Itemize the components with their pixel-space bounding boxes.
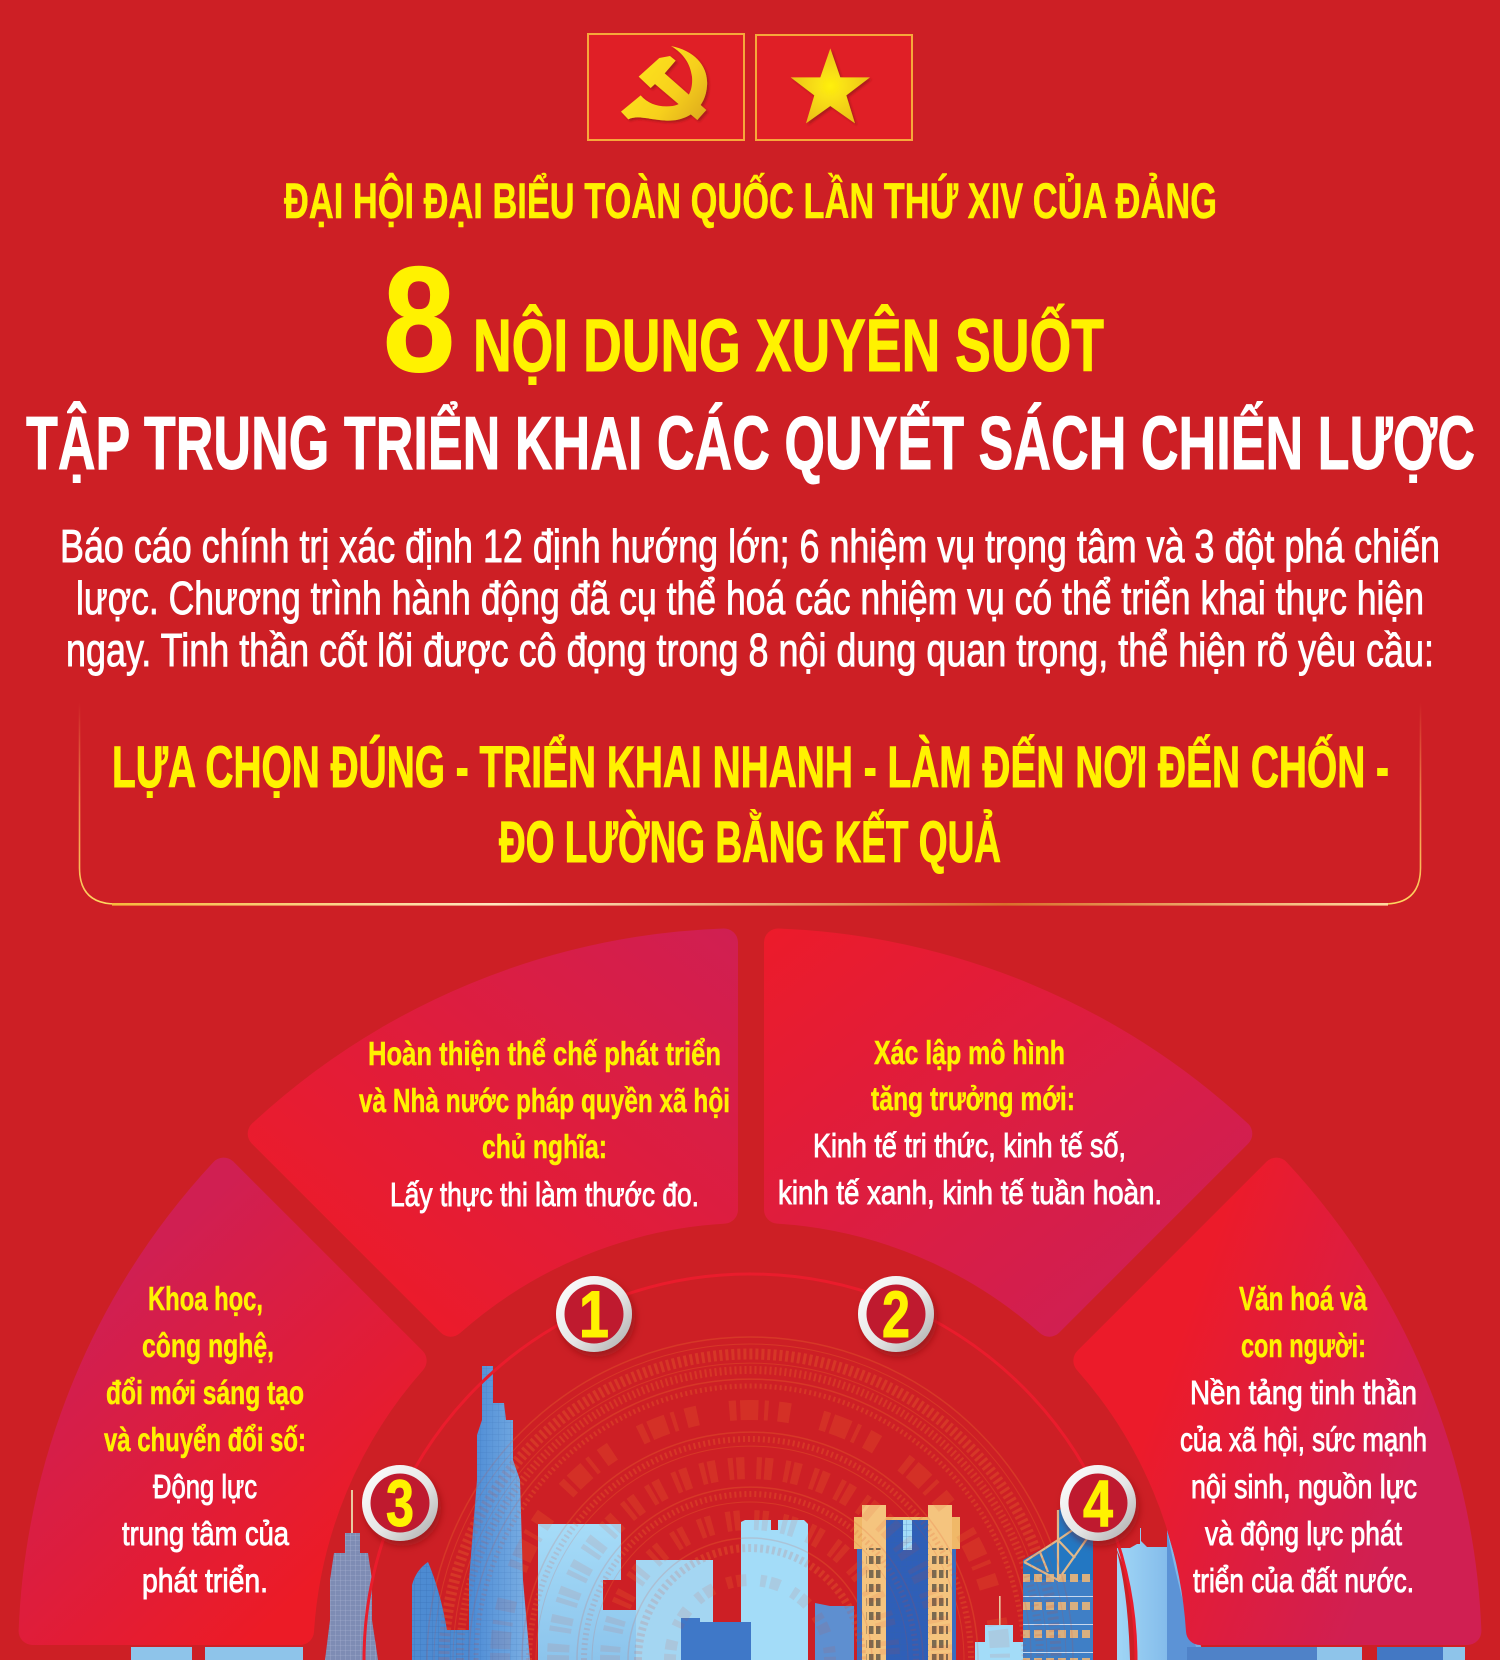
panel text: và động lực phát — [1205, 1515, 1402, 1552]
panel text: phát triển. — [142, 1562, 268, 1599]
callout: core requirement box — [80, 703, 1420, 906]
panel text: trung tâm của — [122, 1515, 290, 1552]
drum pattern overlay on buildings — [427, 1337, 1073, 1660]
badge: number 2 — [858, 1276, 934, 1352]
panel text: nội sinh, nguồn lực — [1191, 1468, 1417, 1505]
panel text: Hoàn thiện thể chế phát triển — [368, 1035, 721, 1072]
badge: number 3 — [362, 1465, 438, 1541]
panel text — [359, 1035, 730, 1213]
panel: institutions — [262, 942, 730, 1323]
title: 8 themes — [383, 235, 1104, 403]
small spire building — [975, 1596, 1023, 1660]
badge: number 4: 4 — [1083, 1466, 1113, 1540]
panel text: và Nhà nước pháp quyền xã hội — [359, 1082, 730, 1119]
lattice bank tower — [1023, 1500, 1093, 1660]
tall curved tower right — [1116, 1528, 1205, 1660]
badge: number 2: 2 — [882, 1277, 910, 1351]
panel text: con người: — [1241, 1327, 1366, 1364]
panel text: Xác lập mô hình — [874, 1034, 1065, 1071]
panel: culture and people — [1087, 1172, 1467, 1631]
intro paragraph — [60, 520, 1440, 676]
panel text: Văn hoá và — [1239, 1280, 1367, 1317]
panel text: kinh tế xanh, kinh tế tuần hoàn. — [778, 1174, 1162, 1211]
wide building — [636, 1560, 713, 1660]
badge: number 3: 3 — [386, 1466, 414, 1540]
drum pattern — [427, 1337, 1073, 1660]
light blue building — [538, 1524, 643, 1660]
panel text: đổi mới sáng tạo — [106, 1374, 304, 1411]
icon: national flag with star — [756, 35, 912, 140]
panel text — [1180, 1280, 1427, 1599]
panel text — [104, 1280, 306, 1599]
side block — [815, 1603, 854, 1660]
panel text: tăng trưởng mới: — [871, 1080, 1075, 1117]
title: 8 themes: 8 — [383, 235, 455, 403]
dark blue block — [681, 1618, 751, 1660]
landmark tower — [469, 1366, 530, 1660]
panel text: Động lực — [153, 1468, 257, 1505]
panel text — [778, 1034, 1162, 1211]
curved tower — [412, 1562, 469, 1660]
panel: science and technology — [33, 1172, 413, 1631]
panel text: Kinh tế tri thức, kinh tế số, — [813, 1127, 1126, 1164]
notched tall building — [741, 1520, 808, 1660]
title: 8 themes: NỘI DUNG XUYÊN SUỐT — [473, 304, 1104, 387]
panel text: của xã hội, sức mạnh — [1180, 1421, 1427, 1458]
badge: number 1 — [556, 1276, 632, 1352]
panel text: công nghệ, — [142, 1327, 274, 1364]
panel text: chủ nghĩa: — [482, 1128, 607, 1165]
icon: party flag with hammer and sickle — [588, 34, 744, 140]
panel text: triển của đất nước. — [1193, 1562, 1414, 1599]
city skyline — [131, 1366, 1465, 1660]
panel text: Lấy thực thi làm thước đo. — [390, 1176, 699, 1213]
twin-pillar golden tower — [854, 1505, 960, 1660]
panel text: Khoa học, — [148, 1280, 263, 1317]
panel text: và chuyển đổi số: — [104, 1421, 306, 1458]
callout: core requirement box: ĐO LƯỜNG BẰNG KẾT QUẢ — [499, 810, 1001, 875]
badge: number 1: 1 — [579, 1277, 609, 1351]
grey tower with spire — [325, 1490, 378, 1660]
panel: growth model — [778, 942, 1238, 1323]
badge: number 4 — [1060, 1465, 1136, 1541]
ring line — [364, 1274, 1136, 1660]
bottom row buildings — [131, 1647, 1465, 1660]
panel text: Nền tảng tinh thần — [1190, 1374, 1417, 1411]
